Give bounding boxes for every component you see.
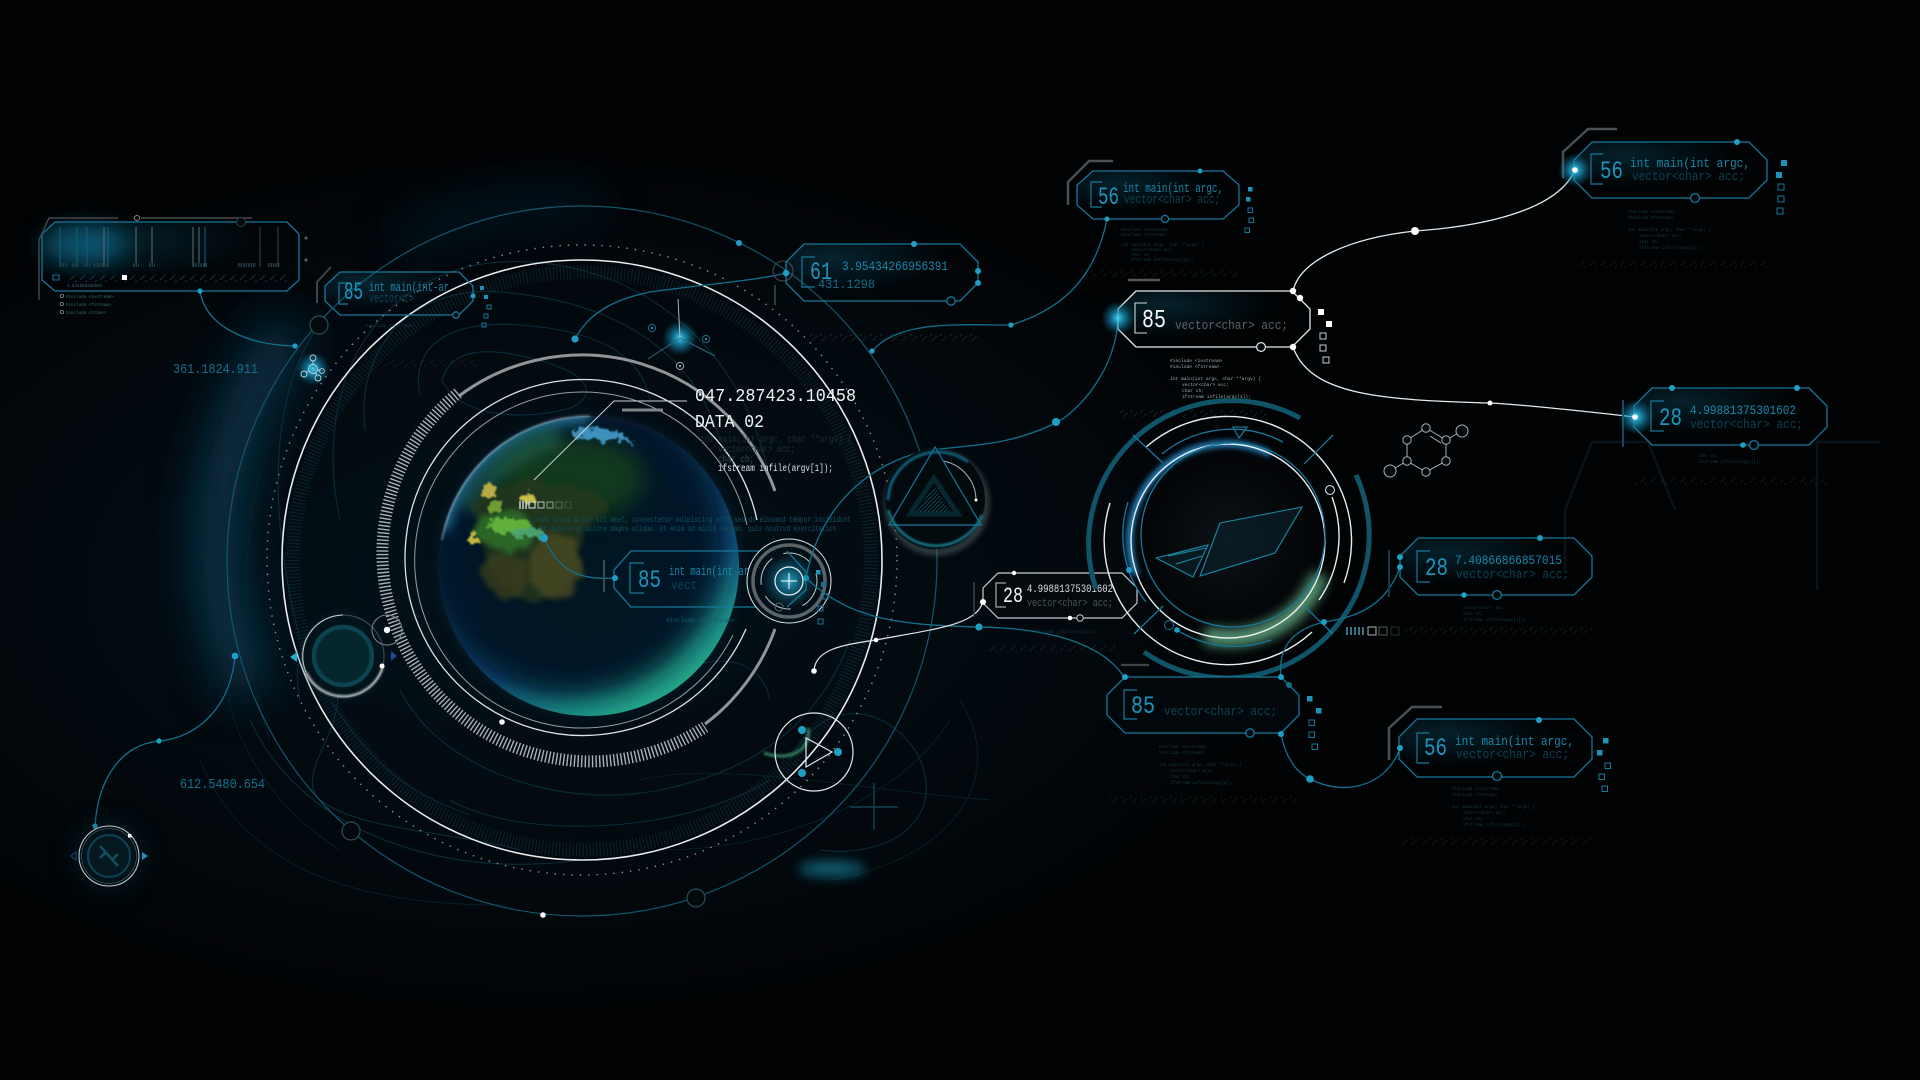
lorem text: Lorem ipsum dolor sit amet, consectetur adipiscing elit,sed do eiusmod tempor incididunt bbox=[530, 516, 851, 525]
panel: 28 lower right bbox=[1281, 535, 1592, 677]
icon: molecule right bbox=[1384, 424, 1468, 477]
panel: 56 top right: vector<char> acc; bbox=[1639, 234, 1682, 239]
target reticle bbox=[747, 539, 831, 624]
panel: 85 highlighted: ifstream infile(argv[1]); bbox=[1182, 394, 1251, 400]
crosshair marker bbox=[850, 783, 898, 830]
panel: 85 lower: ifstream infile(argv[1]); bbox=[1170, 781, 1233, 786]
value 612: 612.5480.654 bbox=[180, 777, 265, 793]
icon: target node top bbox=[648, 299, 715, 370]
dotted orbit bbox=[267, 245, 897, 875]
panel: 56 top right: char ch; bbox=[1639, 240, 1659, 245]
contour lines bbox=[250, 262, 926, 864]
panel: 28 lower right: vector<char> acc; bbox=[1456, 568, 1569, 582]
panel: 28 lower right: char ch; bbox=[1463, 612, 1483, 617]
panel: 85 highlighted: int main(int argc, char **argv) { bbox=[1170, 376, 1261, 382]
icon: satellite control lower left bbox=[71, 653, 238, 892]
panel: 85 highlighted: 85 bbox=[1142, 305, 1166, 335]
coordinates heading bbox=[695, 387, 856, 433]
main white orbit bbox=[282, 260, 882, 860]
value 361: 361.1824.911 bbox=[173, 362, 258, 378]
panel: 85 lower: int main(int argc, char **argv) { bbox=[1159, 763, 1242, 768]
panel: 56 lower right: ifstream infile(argv[1]); bbox=[1463, 823, 1526, 828]
panel: 56 top right: int main(int argc, bbox=[1630, 157, 1750, 171]
panel: 28 centre: 4.99881375301602 bbox=[1027, 584, 1113, 596]
panel: 56 top middle: 56 bbox=[1098, 183, 1119, 212]
orbit markers bbox=[310, 316, 705, 907]
white dot on inner ring bbox=[499, 719, 505, 725]
panel: centre 85 on globe: int main(int ar bbox=[669, 565, 749, 579]
panel: 56 top right bbox=[1558, 129, 1787, 268]
code snippet by globe bbox=[700, 434, 852, 475]
panel: 85 lower: vector<char> acc; bbox=[1164, 705, 1277, 719]
panel: 85 highlighted: vector<char> acc; bbox=[1175, 319, 1288, 333]
icon: play button bbox=[764, 713, 853, 791]
panel: 56 top right: 56 bbox=[1600, 157, 1623, 186]
panel: 28 lower right: 7.40866866857015 bbox=[1455, 554, 1562, 568]
glow spot bbox=[798, 861, 866, 877]
panel: 85 upper left: int main(int-ar bbox=[369, 281, 449, 295]
panel: 85 upper left: #include <iostream> bbox=[366, 324, 414, 329]
lorem text bbox=[530, 516, 851, 624]
panel: 28 right: ifstream infile(argv[1]); bbox=[1698, 460, 1761, 465]
hatched ring bbox=[382, 393, 705, 761]
panel: 85 upper left bbox=[317, 267, 491, 367]
panel: 56 top right: int main(int argc, char **argv) { bbox=[1628, 228, 1711, 233]
panel: 56 top middle: int main(int argc, bbox=[1123, 182, 1223, 196]
panel: 56 lower right: int main(int argc, char **argv) { bbox=[1452, 805, 1535, 810]
glow behind outer ring bbox=[218, 203, 600, 690]
panel: 56 top right: #include <fstream> bbox=[1628, 216, 1674, 221]
panel: 85 lower: char ch; bbox=[1170, 775, 1190, 780]
panel: 56 lower right bbox=[1389, 707, 1610, 845]
panel: 85 lower: 85 bbox=[1131, 692, 1155, 721]
panel: 85 lower: #include <fstream> bbox=[1159, 751, 1205, 756]
panel: 56 lower right: vector<char> acc; bbox=[1463, 811, 1506, 816]
panel: 56 top middle: #include <fstream> bbox=[1121, 233, 1167, 238]
panel: 56 lower right: int main(int argc, bbox=[1455, 735, 1574, 749]
panel: 28 lower right: ifstream infile(argv[1]); bbox=[1463, 618, 1526, 623]
coordinates heading: 047.287423.10458 bbox=[695, 387, 856, 407]
globe progress squares bbox=[520, 501, 571, 509]
globe bbox=[437, 413, 742, 718]
icon: lens circle left bbox=[290, 612, 402, 700]
panel: telemetry top left bbox=[39, 216, 308, 349]
white dot bottom orbit bbox=[540, 912, 546, 918]
grey arc top right bbox=[459, 355, 775, 724]
panel: 56 top middle: vector<char> acc; bbox=[1131, 248, 1174, 253]
triangle lens bbox=[885, 447, 986, 552]
panel: 28 centre: 28 bbox=[1003, 584, 1023, 609]
panel: 56 top right: ifstream infile(argv[1]); bbox=[1639, 246, 1702, 251]
panel: 85 lower: #include <iostream> bbox=[1159, 745, 1207, 750]
panel: 85 upper left: 85 bbox=[344, 278, 363, 307]
teal inner rings bbox=[1123, 427, 1333, 646]
code snippet by globe: char ch; bbox=[718, 454, 754, 466]
white broken ring bbox=[1104, 416, 1352, 665]
inner rings bbox=[405, 379, 757, 735]
panel: 28 right: vector<char> acc; bbox=[1690, 418, 1803, 432]
code snippet by globe: int main(int argc, char **argv) { bbox=[700, 434, 852, 446]
panel: centre 85 on globe: vect bbox=[671, 579, 697, 593]
panel: 61: 3.95434266956391 bbox=[842, 260, 948, 274]
panel: 56 lower right: #include <iostream> bbox=[1452, 787, 1500, 792]
panel: 28 right: char ch; bbox=[1698, 454, 1718, 459]
icon: laptop bbox=[1156, 507, 1302, 577]
panel: 28 lower right: vector<char> acc; bbox=[1463, 606, 1506, 611]
faint schematic shapes on the right bbox=[1565, 442, 1880, 590]
panel: 28 right: 28 bbox=[1659, 404, 1682, 433]
leader line bbox=[534, 401, 687, 480]
panel: centre 85 on globe bbox=[540, 534, 806, 607]
panel: 56 top middle: vector<char> acc; bbox=[1124, 193, 1220, 207]
panel: 85 highlighted: vector<char> acc; bbox=[1182, 382, 1229, 388]
panel: 28 centre bbox=[806, 571, 1137, 677]
code snippet by globe: ifstream infile(argv[1]); bbox=[718, 463, 833, 475]
code snippet by globe: vector<char> acc; bbox=[718, 444, 795, 456]
coordinates heading: DATA 02 bbox=[695, 413, 764, 433]
panel: 85 highlighted: #include <iostream> bbox=[1170, 358, 1223, 364]
icon: molecule left bbox=[296, 352, 330, 386]
panel: telemetry top left: #include <ctime> bbox=[66, 311, 107, 316]
panel: 61: 431.1298 bbox=[818, 278, 875, 292]
panel: 56 top right: vector<char> acc; bbox=[1632, 170, 1745, 184]
panel: 56 top middle: #include <iostream> bbox=[1121, 228, 1169, 233]
panel: 85 lower: vector<char> acc; bbox=[1170, 769, 1213, 774]
panel: 56 top right: #include <iostream> bbox=[1628, 210, 1676, 215]
land base bbox=[475, 480, 604, 602]
thick outer arcs bbox=[1089, 401, 1369, 678]
panel: telemetry top left: 4.534563235591 bbox=[67, 285, 103, 289]
panel: 56 top middle bbox=[869, 161, 1254, 354]
panel: 61: 61 bbox=[810, 258, 832, 287]
panel: 85 highlighted: #include <fstream> bbox=[1170, 364, 1220, 370]
panel: 56 top middle: char ch; bbox=[1131, 253, 1151, 258]
panel: 28 centre: ifstream infile(argv[1]); bbox=[1034, 630, 1097, 635]
lorem text: #include <iostream> bbox=[666, 617, 735, 624]
panel: 56 lower right: 56 bbox=[1424, 734, 1447, 763]
panel: 85 highlighted: char ch; bbox=[1182, 388, 1204, 394]
panel: 85 highlighted bbox=[806, 170, 1635, 578]
laptop sensor bbox=[1089, 401, 1369, 678]
panel: centre 85 on globe: 85 bbox=[638, 566, 661, 595]
panel: 56 lower right: #include <fstream> bbox=[1452, 793, 1498, 798]
panel: 61 bbox=[571, 240, 981, 343]
lorem text: ut labore et dolore magna aliqua. Ut enim ad minim veniam, quis nostrud exercitation bbox=[540, 525, 836, 534]
panel: 28 right: 4.99881375301602 bbox=[1690, 404, 1796, 418]
panel: 56 top middle: int main(int argc, char **argv) { bbox=[1121, 243, 1204, 248]
panel: telemetry top left: #include <iostream> bbox=[66, 295, 114, 300]
panel: 56 top middle: ifstream infile(argv[1]); bbox=[1131, 258, 1194, 263]
panel: telemetry top left: #include <fstream> bbox=[66, 303, 112, 308]
panel: 28 centre: vector<char> acc; bbox=[1027, 598, 1113, 610]
panel: 85 upper left: vector<t> bbox=[369, 292, 414, 306]
outer teal orbit bbox=[227, 206, 937, 916]
panel: 28 lower right: 28 bbox=[1425, 554, 1448, 583]
panel: 28 right bbox=[1618, 385, 1827, 485]
panel: 56 lower right: vector<char> acc; bbox=[1456, 748, 1569, 762]
panel: 56 lower right: char ch; bbox=[1463, 817, 1483, 822]
panel: 85 lower bbox=[1107, 665, 1400, 803]
